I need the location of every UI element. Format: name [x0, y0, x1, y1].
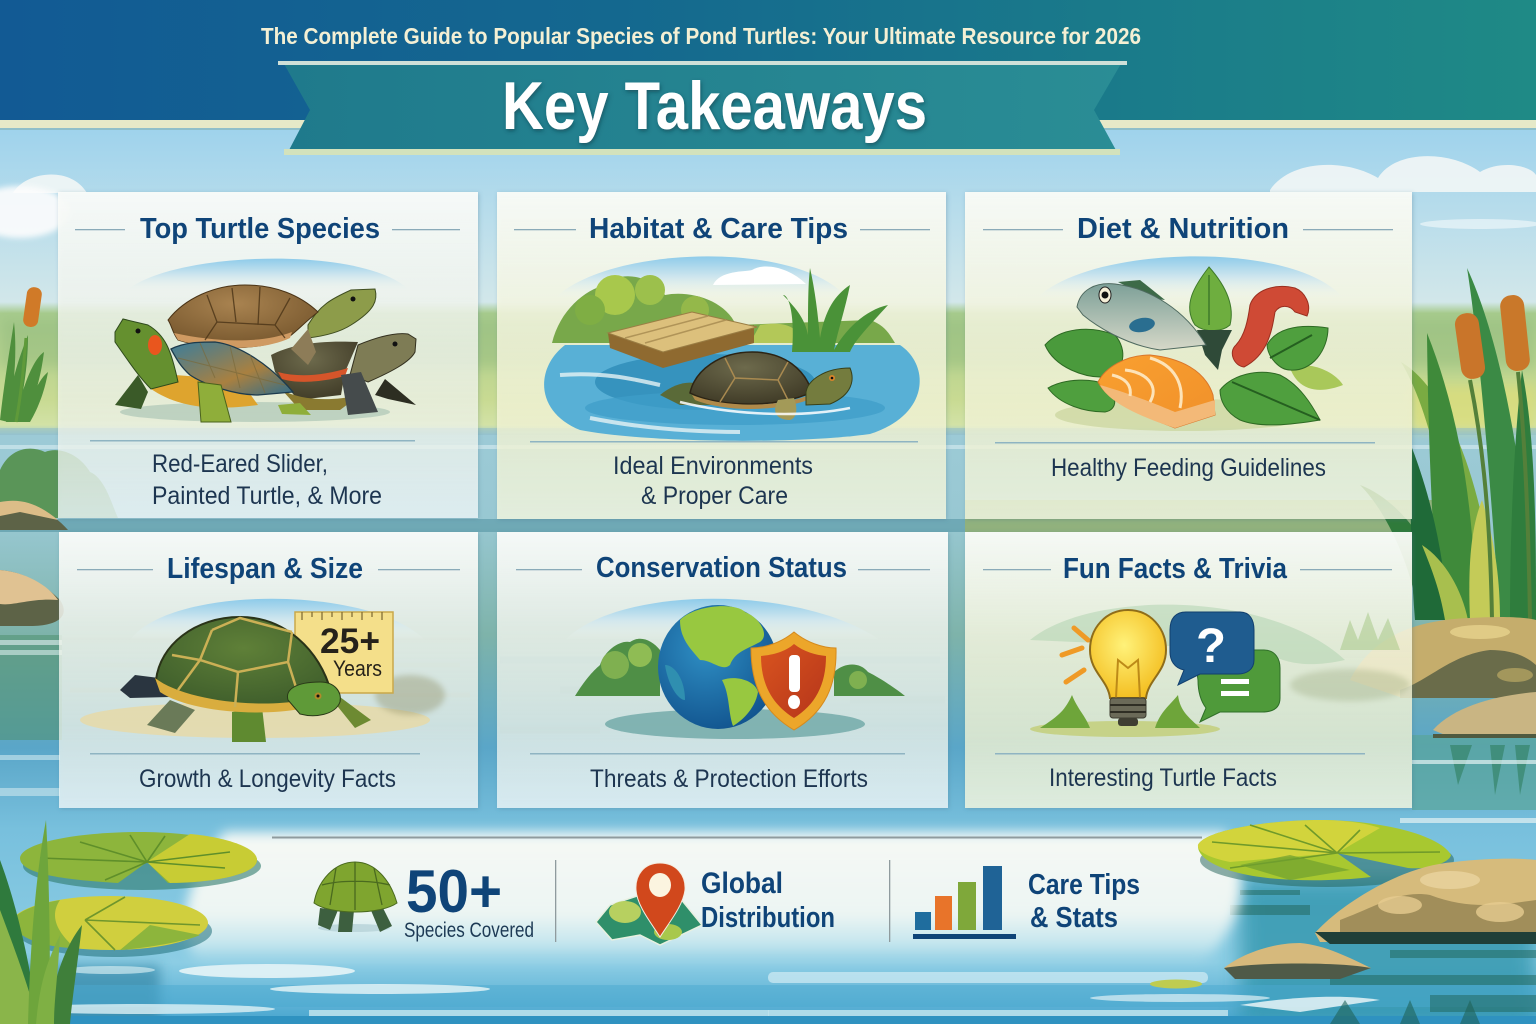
- text: interesting facts: Interesting Turtle Facts: [1049, 764, 1277, 792]
- stat: global distribution: Distribution: [701, 902, 835, 934]
- stat: global distribution: [701, 867, 835, 934]
- text: species names: Painted Turtle, & More: [152, 482, 382, 510]
- left reeds and cattail: [0, 286, 48, 422]
- icon: fish, salmon, worm and leaves: [1045, 267, 1343, 431]
- panel: habitat and care tips: [497, 192, 946, 519]
- text: threats: Threats & Protection Efforts: [590, 765, 868, 793]
- stat: global distribution: Global: [701, 867, 783, 900]
- heading: top turtle species: Top Turtle Species: [140, 213, 380, 245]
- panel: diet and nutrition: [965, 192, 1412, 519]
- stats strip background: [185, 832, 1241, 965]
- stat: care tips and stats: [1028, 869, 1140, 934]
- panel: fun facts and trivia: [965, 532, 1412, 808]
- stat: 50+ species covered: [404, 858, 534, 942]
- heading: diet: Diet & Nutrition: [1077, 213, 1289, 245]
- icon: globe with warning shield: [575, 605, 905, 739]
- icon: map pin: [596, 863, 702, 945]
- stat: 50+ species covered: Species Covered: [404, 919, 534, 942]
- right reeds and cattails: [1360, 268, 1536, 620]
- text: environments: & Proper Care: [641, 482, 788, 510]
- left rocks: [0, 501, 68, 626]
- icon: turtle with ruler: 25+: [320, 622, 380, 661]
- text: environments: Ideal Environments: [613, 452, 813, 480]
- heading: habitat: Habitat & Care Tips: [589, 213, 848, 245]
- foreground rocks: [1224, 859, 1536, 979]
- stat: 50+ species covered: 50+: [406, 858, 502, 925]
- subtitle: The Complete Guide to Popular Species of Pond Turtles: Your Ultimate Resource for 2026: [261, 23, 1141, 49]
- bottom left grass: [0, 820, 82, 1024]
- icon: group of turtles: [115, 285, 416, 422]
- right rocks: [1350, 617, 1536, 738]
- stat: care tips and stats: & Stats: [1030, 902, 1118, 934]
- title: Key Takeaways: [502, 68, 927, 144]
- icon: light bulb and speech bubbles: [1030, 610, 1280, 737]
- text: environments: [613, 452, 813, 510]
- heading: conservation: Conservation Status: [596, 552, 847, 584]
- heading: fun facts: Fun Facts & Trivia: [1063, 553, 1288, 585]
- icon: bar chart: [913, 866, 1016, 939]
- panel: lifespan and size: [59, 532, 478, 808]
- panel: top turtle species: [58, 192, 478, 518]
- stat: care tips and stats: Care Tips: [1028, 869, 1140, 901]
- text: growth facts: Growth & Longevity Facts: [139, 765, 396, 793]
- ribbon banner with title: [278, 61, 1127, 155]
- icon: turtle with ruler: Years: [333, 656, 382, 681]
- text: species names: [152, 450, 382, 510]
- icon: small turtle: [314, 862, 397, 932]
- header band: [0, 0, 1536, 130]
- icon: light bulb and speech bubbles: ?: [1196, 620, 1226, 673]
- left bushes: [0, 449, 118, 518]
- lily pads: [12, 820, 1454, 988]
- text: feeding guidelines: Healthy Feeding Guidelines: [1051, 454, 1326, 482]
- icon: pond with dock and turtle: [544, 266, 920, 441]
- icon: turtle with ruler: [80, 612, 445, 742]
- heading: lifespan: Lifespan & Size: [167, 553, 363, 585]
- text: species names: Red-Eared Slider,: [152, 450, 328, 478]
- panel: conservation status: [497, 532, 948, 808]
- stats strip: [272, 836, 1202, 945]
